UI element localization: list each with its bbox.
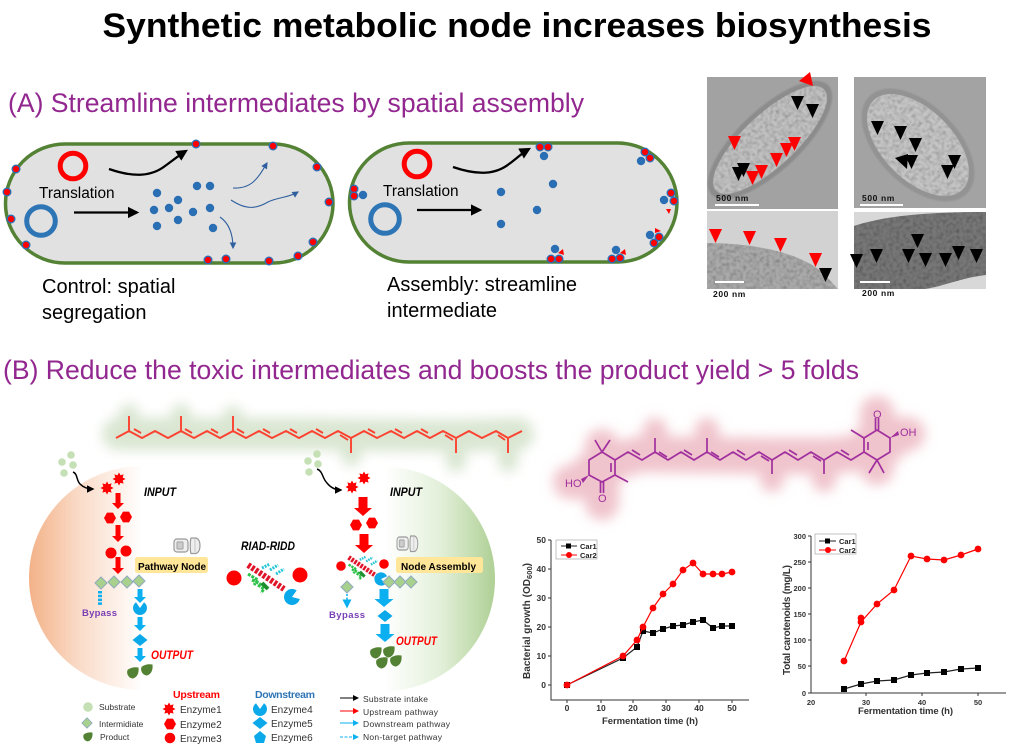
y tick labels: 0 [802, 689, 806, 698]
astaxanthin wedge bonds [581, 431, 899, 483]
downstream arrow 2 [376, 624, 394, 642]
RIAD-RIDD label: RIAD-RIDD [241, 541, 295, 553]
y axis title: Total carotenoids (mg/L) [782, 565, 793, 675]
y tick labels: 200 [793, 584, 806, 593]
series: Car1 [841, 665, 981, 692]
icon: red plasmid [60, 153, 86, 179]
arrow: lower translation [74, 211, 137, 214]
legend [82, 689, 451, 745]
title: Synthetic metabolic node increases biosynthesis [102, 7, 932, 45]
chart legend: Car1 [839, 537, 856, 546]
astaxanthin skeleton [589, 418, 890, 493]
bypass arrow [98, 591, 102, 606]
series: Car2 [564, 560, 735, 688]
molecule: lycopene [116, 414, 522, 462]
micrograph: top left: 500 nm [716, 193, 749, 203]
lycopene skeleton [116, 416, 522, 453]
y tick labels: 300 [793, 532, 806, 541]
x tick labels: 10 [596, 703, 606, 713]
arrow: upper translation [109, 151, 186, 175]
output label: OUTPUT [151, 648, 194, 662]
astaxanthin atom labels [565, 409, 917, 505]
y tick labels: 0 [541, 680, 546, 690]
astaxanthin atom labels: HO [565, 478, 582, 490]
axes and ticks [548, 540, 749, 703]
cell: control gradient [29, 466, 143, 690]
assembled enzyme clusters [350, 143, 678, 263]
x axis title: Fermentation time (h) [858, 706, 953, 717]
y tick labels: 150 [793, 610, 806, 619]
legend: downstream enzymes: Downstream [255, 689, 315, 701]
pathway node label [135, 557, 208, 573]
legend: downstream enzymes: Enzyme4 [271, 705, 313, 716]
panel: assembly cell diagram [350, 143, 678, 322]
y tick labels: 100 [793, 636, 806, 645]
intermediates [95, 575, 145, 589]
x tick labels: 0 [565, 703, 570, 713]
substrate intake arrow [317, 469, 341, 490]
micrograph: bottom left: 200 nm [713, 289, 746, 299]
panel: control cell diagram [3, 140, 333, 324]
chart legend: Car2 [580, 551, 597, 560]
x tick labels: 20 [807, 698, 815, 707]
astaxanthin atom labels: O [598, 493, 607, 505]
y tick labels: 10 [537, 651, 546, 661]
label: translation: Translation [383, 183, 459, 200]
y tick labels: 250 [793, 558, 806, 567]
micrograph: top left [690, 63, 850, 217]
legend: upstream enzymes: Upstream [173, 689, 220, 701]
pathway node label: Pathway Node [138, 562, 206, 573]
node assembly label: Node Assembly [401, 562, 476, 573]
legend: arrows: Non-target pathway [363, 732, 443, 742]
substrate dots [304, 450, 322, 476]
y axis title: Bacterial growth (OD [522, 579, 533, 679]
icon: ribosome [174, 538, 200, 554]
legend: arrows [340, 694, 451, 742]
enzyme 1 [100, 472, 126, 494]
cell body: assembly [350, 143, 677, 262]
chart: total carotenoids [782, 532, 1006, 717]
y tick labels [537, 535, 546, 690]
scaffold protein helix [248, 564, 284, 593]
input label: INPUT [390, 485, 423, 499]
upstream arrow 2 [355, 534, 373, 553]
bypass arrow [346, 594, 348, 607]
micrograph: top right: 500 nm [862, 193, 895, 203]
chart legend [556, 540, 597, 560]
molecule: astaxanthin [565, 409, 917, 505]
downstream arrow 2 [134, 617, 146, 631]
y axis title: 600 [525, 566, 534, 579]
enzyme 2 [350, 518, 378, 530]
panel: control pathway [58, 451, 208, 678]
legend: upstream enzymes: Enzyme3 [180, 734, 222, 745]
legend: arrows: Substrate intake [363, 694, 428, 704]
x tick labels: 50 [727, 703, 737, 713]
upstream arrow 3 [112, 557, 124, 574]
cell body: control [6, 144, 333, 263]
legend: downstream enzymes: Enzyme6 [271, 733, 313, 744]
x tick labels: 40 [918, 698, 926, 707]
heading: section A: (A) Streamline intermediates by spatial assembly [8, 88, 585, 118]
downstream arrow 3 [134, 648, 146, 662]
lycopene glow [118, 414, 518, 462]
y axis title: ) [522, 563, 533, 566]
astaxanthin atom labels: O [873, 409, 882, 421]
legend: molecules [82, 702, 144, 742]
caption: assembly: Assembly: streamline [387, 274, 577, 296]
substrate intake arrow [73, 472, 93, 489]
products [127, 664, 153, 678]
icon: ribosome [397, 536, 418, 552]
enzyme 3 [106, 546, 132, 558]
heading: section B: (B) Reduce the toxic intermediates and boosts the product yield > 5 folds [3, 355, 859, 385]
intermediates [383, 576, 417, 588]
icon: red plasmid [404, 151, 430, 177]
diffusion arrows [220, 163, 298, 248]
legend: upstream enzymes [162, 689, 222, 745]
enzyme 5 [132, 634, 148, 646]
chart: bacterial growth [522, 535, 749, 727]
x tick labels: 30 [862, 698, 870, 707]
free enzymes [497, 180, 557, 228]
upstream arrow 1 [354, 497, 372, 516]
free enzymes in cytoplasm [150, 182, 217, 232]
legend: downstream enzymes: Enzyme5 [271, 719, 313, 730]
enzyme 2 [104, 512, 132, 523]
astaxanthin atom labels: OH [900, 427, 917, 439]
y tick labels: 30 [537, 593, 546, 603]
y tick labels: 50 [798, 662, 806, 671]
chart legend [815, 534, 856, 555]
micrograph: bottom right [850, 212, 986, 298]
caption: control: segregation [42, 302, 147, 324]
legend: upstream enzymes: Enzyme2 [180, 720, 222, 731]
membrane enzymes [3, 140, 333, 265]
chart legend: Car1 [580, 542, 597, 551]
caption: assembly: intermediate [387, 300, 497, 322]
products [370, 646, 402, 668]
substrate dots [58, 451, 77, 477]
micrograph: top right [841, 68, 995, 222]
micrograph: bottom left [707, 211, 838, 299]
enzyme 4 [133, 602, 147, 615]
x tick labels: 40 [694, 703, 704, 713]
x tick labels [807, 698, 982, 707]
attached enzymes [226, 568, 308, 607]
enzyme 1 [346, 472, 370, 494]
icon: blue plasmid [27, 207, 55, 235]
bypass intermediate [341, 581, 353, 593]
legend: arrows: Upstream pathway [363, 707, 439, 717]
bypass label: Bypass [329, 610, 365, 621]
downstream arrow 1 [134, 589, 146, 603]
legend: downstream enzymes [252, 689, 315, 744]
legend: arrows: Downstream pathway [363, 719, 451, 729]
bypass label: Bypass [82, 608, 117, 619]
y tick labels: 50 [537, 535, 546, 545]
output label: OUTPUT [396, 634, 438, 648]
upstream arrow 2 [112, 525, 124, 542]
axes and ticks [808, 536, 1006, 696]
x tick labels: 30 [661, 703, 671, 713]
caption: control: Control: spatial [42, 276, 175, 298]
chart legend: Car2 [839, 546, 856, 555]
input label: INPUT [144, 485, 177, 499]
downstream arrow 1 [374, 589, 394, 607]
enzyme 5 [378, 610, 392, 622]
icon: blue plasmid [371, 205, 399, 233]
series: Car1 [564, 617, 735, 688]
y tick labels: 40 [537, 564, 546, 574]
label: translation: Translation [39, 185, 115, 202]
panel: background cells [29, 466, 495, 691]
panel: node assembly pathway [304, 450, 483, 668]
micrograph: bottom right: 200 nm [862, 288, 895, 298]
x tick labels [565, 703, 737, 713]
x tick labels: 20 [628, 703, 638, 713]
small red pathway arrows [558, 209, 671, 255]
cell: assembly gradient [385, 467, 495, 691]
assembled node [336, 557, 389, 587]
y tick labels: 20 [537, 622, 546, 632]
panel: electron micrographs [690, 63, 995, 299]
astaxanthin glow [570, 413, 908, 503]
arrow: lower translation [417, 209, 480, 211]
node assembly label [396, 557, 483, 573]
x axis title: Fermentation time (h) [602, 716, 698, 727]
y tick labels [793, 532, 806, 698]
legend: molecules: Intermidiate [99, 719, 144, 729]
upstream arrow 1 [112, 493, 124, 509]
x tick labels: 50 [974, 698, 982, 707]
legend: molecules: Substrate [99, 702, 136, 712]
legend: upstream enzymes: Enzyme1 [180, 705, 222, 716]
panel: RIAD-RIDD scaffold [226, 541, 308, 607]
arrow: upper translation [453, 149, 529, 173]
legend: molecules: Product [100, 732, 130, 742]
series: Car2 [841, 546, 981, 664]
